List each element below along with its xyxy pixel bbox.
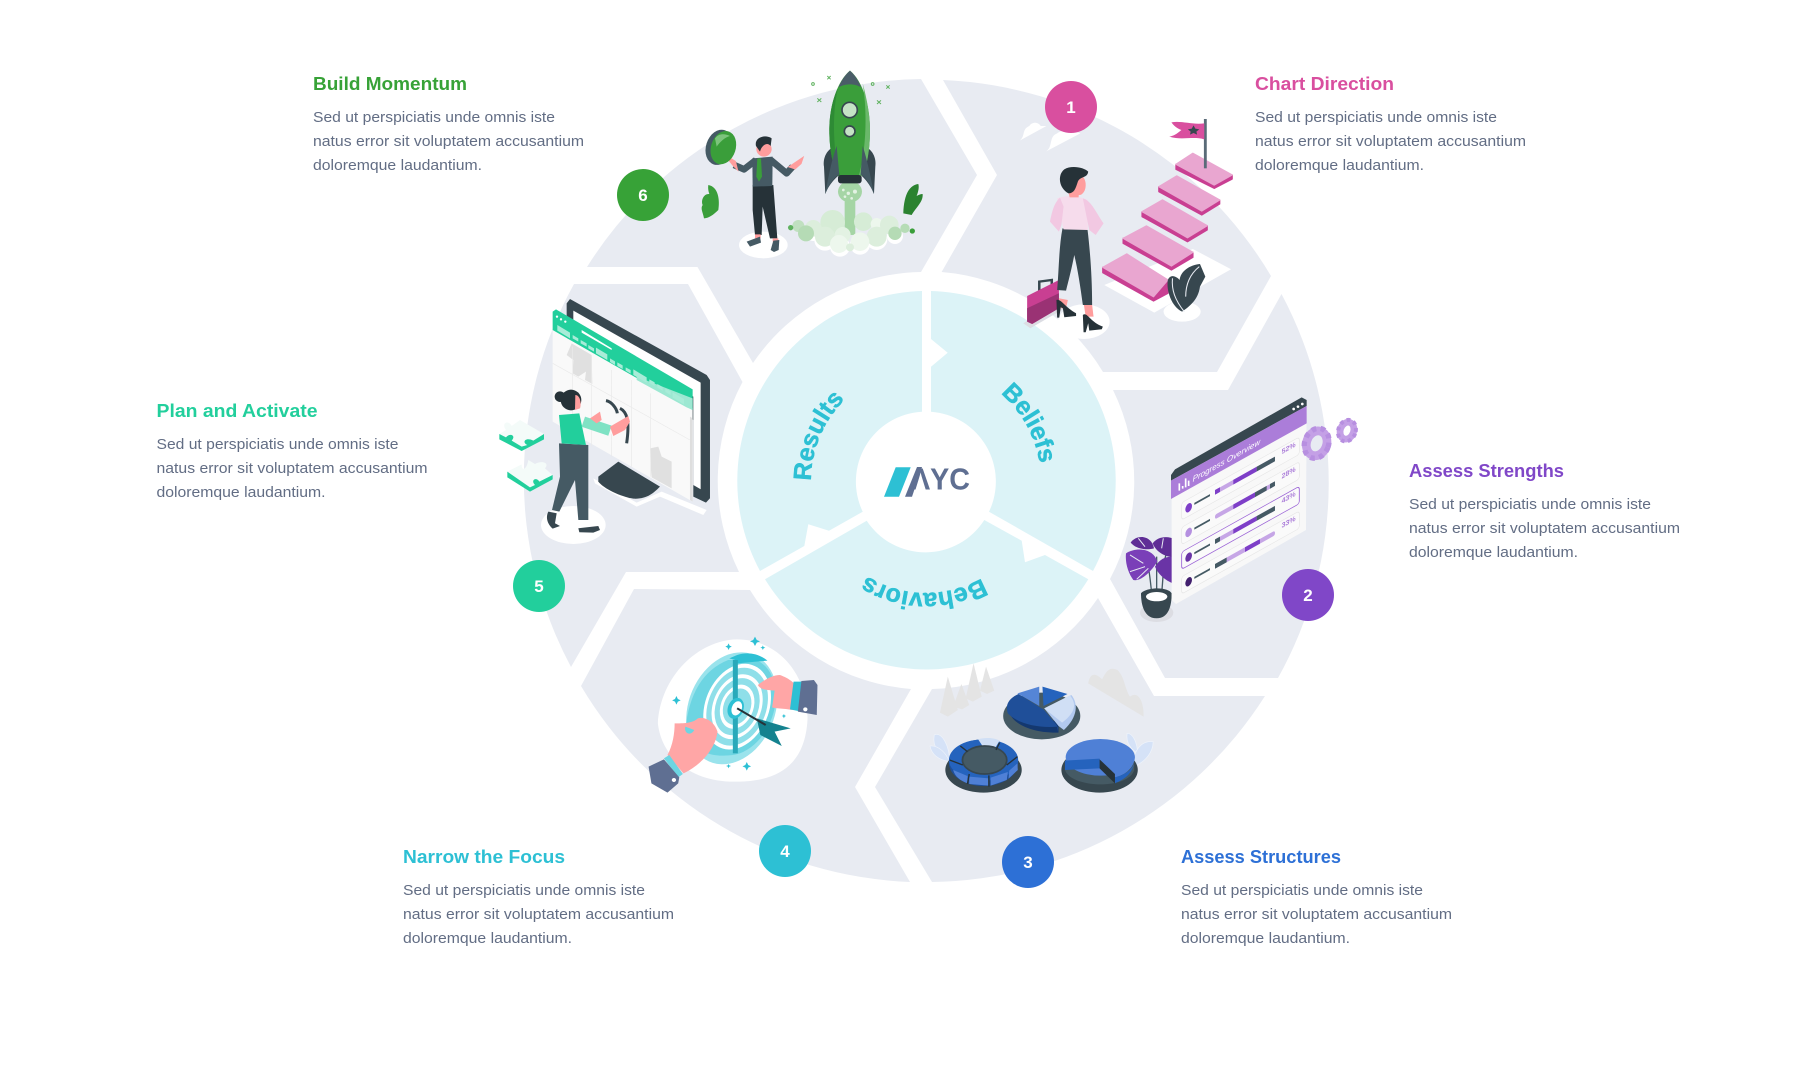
body: natus error sit voluptatem accusantium xyxy=(403,906,674,923)
body: doloremque laudantium. xyxy=(403,930,572,947)
number badge 6: 6 xyxy=(638,186,648,205)
gray spikes xyxy=(940,663,994,717)
plant xyxy=(1167,264,1205,312)
flag xyxy=(1169,119,1207,168)
held puzzle piece xyxy=(604,401,629,443)
step 2 text xyxy=(1409,460,1680,561)
illustration: woman at stairs xyxy=(1020,119,1232,339)
progress rows: 33% xyxy=(1282,514,1296,530)
woman xyxy=(1050,167,1104,332)
body: Sed ut perspiciatis unde omnis iste xyxy=(156,436,398,453)
progress rows: 52% xyxy=(1282,440,1296,456)
body xyxy=(313,109,584,174)
body: Sed ut perspiciatis unde omnis iste xyxy=(1409,496,1651,513)
pale leaves xyxy=(930,733,1153,767)
hand lower left xyxy=(649,718,717,793)
segment 4 xyxy=(581,589,911,882)
segment 3 xyxy=(875,598,1265,882)
outer ring of six segments xyxy=(524,79,1329,882)
body: natus error sit voluptatem accusantium xyxy=(1181,906,1452,923)
body: Sed ut perspiciatis unde omnis iste xyxy=(1255,109,1497,126)
heading: Narrow the Focus xyxy=(403,846,565,867)
window header: Progress Overview xyxy=(1193,436,1261,484)
body: natus error sit voluptatem accusantium xyxy=(313,133,584,150)
body xyxy=(1255,109,1526,174)
loose puzzle pieces xyxy=(499,420,553,492)
heading: Plan and Activate xyxy=(156,400,318,421)
clouds xyxy=(1020,123,1080,152)
inner segment: Beliefs xyxy=(931,291,1116,571)
centre logo: ΛYC xyxy=(911,462,970,496)
body: doloremque laudantium. xyxy=(156,484,326,501)
number badge 3 xyxy=(1002,836,1054,888)
label: Behaviors: Behaviors xyxy=(862,578,988,610)
heading: Assess Structures xyxy=(1181,846,1341,867)
body: Sed ut perspiciatis unde omnis iste xyxy=(403,882,645,899)
plant xyxy=(1126,537,1175,622)
step 6 text xyxy=(313,73,584,174)
number badge 2 xyxy=(1282,569,1334,621)
body: doloremque laudantium. xyxy=(313,157,482,174)
window card xyxy=(1172,406,1307,604)
step 1 text xyxy=(1255,73,1526,174)
body: natus error sit voluptatem accusantium xyxy=(1409,520,1680,537)
pie top xyxy=(1003,687,1080,739)
target xyxy=(671,641,792,775)
leaves xyxy=(702,185,719,218)
progress rows: 43% xyxy=(1282,489,1296,505)
body xyxy=(403,882,674,947)
body: doloremque laudantium. xyxy=(1409,544,1578,561)
hand upper right xyxy=(758,675,817,715)
label: Beliefs: Beliefs xyxy=(1002,382,1054,462)
segment 1 xyxy=(942,80,1271,372)
number badge 1 xyxy=(1045,81,1097,133)
number badge 3: 3 xyxy=(1023,853,1033,872)
green disc xyxy=(701,126,740,169)
woman xyxy=(541,390,630,544)
inner ring of three segments xyxy=(737,291,1116,669)
body xyxy=(1409,496,1680,561)
number badge 1: 1 xyxy=(1066,98,1076,117)
arrow xyxy=(737,708,791,746)
number badge 4: 4 xyxy=(780,842,790,861)
body: natus error sit voluptatem accusantium xyxy=(1255,133,1526,150)
gray hills xyxy=(1088,669,1144,717)
ground xyxy=(1104,249,1231,313)
ring chart xyxy=(945,738,1022,793)
segment 5 xyxy=(524,284,742,667)
body: doloremque laudantium. xyxy=(1255,157,1424,174)
number badge 5: 5 xyxy=(534,577,544,596)
heading: Chart Direction xyxy=(1255,73,1394,94)
body: natus error sit voluptatem accusantium xyxy=(156,460,428,477)
number badge 2: 2 xyxy=(1303,586,1313,605)
number badge 5 xyxy=(513,560,565,612)
puzzle window xyxy=(553,309,693,502)
segment 2 xyxy=(1110,294,1329,678)
body: Sed ut perspiciatis unde omnis iste xyxy=(313,109,555,126)
step 4 text xyxy=(403,846,674,947)
monitor xyxy=(567,299,710,515)
progress rows xyxy=(1182,437,1299,594)
sparkles xyxy=(812,76,890,104)
window header xyxy=(1171,397,1307,499)
heading: Assess Strengths xyxy=(1409,460,1564,481)
body xyxy=(156,436,428,501)
inner segment: Behaviors xyxy=(765,520,1088,669)
number badge 6 xyxy=(617,169,669,221)
step 5 text xyxy=(156,400,428,501)
suitcase xyxy=(1023,280,1068,328)
progress rows: 28% xyxy=(1282,464,1296,481)
stairs xyxy=(1103,153,1232,301)
smoke xyxy=(788,197,915,257)
sparkles xyxy=(672,637,786,771)
illustration: progress overview window xyxy=(1126,397,1359,622)
inner segment: Results xyxy=(737,291,922,571)
curved labels xyxy=(793,382,1054,610)
illustration: woman with puzzle screen xyxy=(499,299,710,544)
step 3 text xyxy=(1181,846,1452,947)
centre logo xyxy=(884,462,970,497)
white blob xyxy=(658,639,808,782)
heading: Build Momentum xyxy=(313,73,467,94)
body: doloremque laudantium. xyxy=(1181,930,1350,947)
body xyxy=(1181,882,1452,947)
segment 6 xyxy=(587,79,977,363)
rocket xyxy=(824,71,876,202)
illustration: target and hands xyxy=(649,637,817,793)
illustration: rocket launch and man xyxy=(701,71,923,258)
illustration: pie charts xyxy=(930,663,1153,793)
gears xyxy=(1300,417,1359,462)
man xyxy=(727,136,802,258)
body: Sed ut perspiciatis unde omnis iste xyxy=(1181,882,1423,899)
full pie xyxy=(1061,739,1138,793)
label: Results: Results xyxy=(793,392,843,480)
number badge 4 xyxy=(759,825,811,877)
